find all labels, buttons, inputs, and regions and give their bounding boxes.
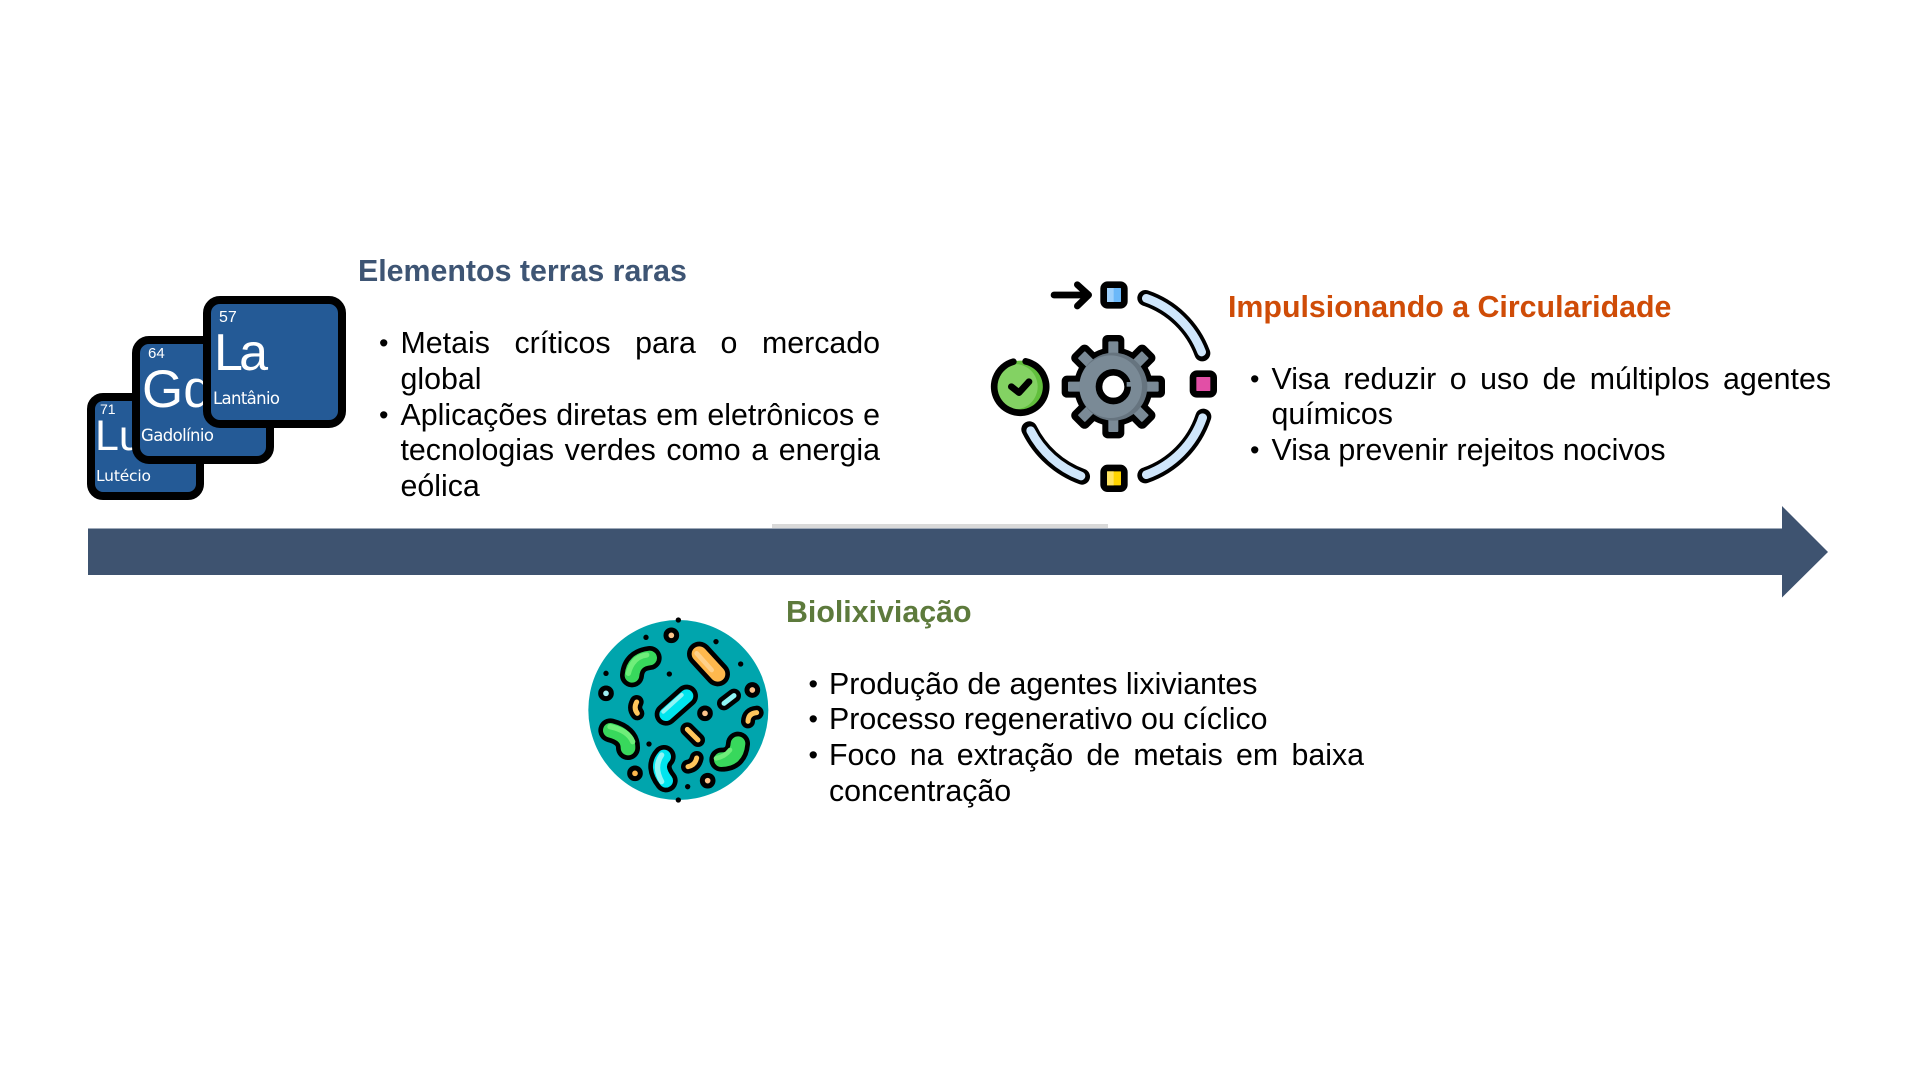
bullet list: biolixiviação: Foco na extração de metais em baixa concentração <box>829 739 1364 808</box>
bullet list: impulsionando a circularidade: Visa prevenir rejeitos nocivos <box>1272 434 1666 467</box>
icon: periodic table tiles: La <box>214 324 268 382</box>
bullet list: elementos terras raras: Aplicações diretas em eletrônicos e tecnologias verdes como a energia eólica <box>400 399 880 503</box>
icon: periodic table tiles: Lantânio <box>213 389 280 408</box>
icon: periodic table tiles: 57 <box>219 309 237 326</box>
icon: gear cycle <box>990 281 1217 492</box>
panel: elementos terras raras <box>87 255 880 503</box>
bullet list: elementos terras raras <box>380 327 880 503</box>
bullet list: elementos terras raras: Metais críticos para o mercado global <box>400 327 880 396</box>
panel: biolixiviação <box>588 596 1364 808</box>
decorative grey bar above timeline <box>772 524 1108 528</box>
icon: periodic table tiles: 64 <box>148 345 165 362</box>
bullet list: biolixiviação: Produção de agentes lixiviantes <box>829 668 1257 700</box>
bullet list: impulsionando a circularidade: Visa reduzir o uso de múltiplos agentes químicos <box>1272 362 1831 431</box>
bullet list: biolixiviação <box>810 668 1364 808</box>
heading: elementos terras raras: Elementos terras raras <box>358 255 687 288</box>
timeline arrow <box>88 506 1828 598</box>
bullet list: impulsionando a circularidade <box>1251 362 1831 467</box>
icon: periodic table tiles: 71 <box>100 401 116 417</box>
heading: biolixiviação: Biolixiviação <box>786 596 972 629</box>
bullet list: biolixiviação: Processo regenerativo ou cíclico <box>829 703 1268 736</box>
icon: periodic table tiles <box>87 296 346 500</box>
icon: bacteria culture <box>588 617 768 803</box>
icon: periodic table tiles: Lu <box>95 412 143 460</box>
icon: periodic table tiles: Gadolínio <box>141 426 214 445</box>
icon: periodic table tiles: Lutécio <box>96 467 151 485</box>
heading: impulsionando a circularidade: Impulsionando a Circularidade <box>1228 291 1671 324</box>
icon: periodic table tiles: Gd <box>142 360 213 419</box>
panel: impulsionando a circularidade <box>990 281 1831 492</box>
